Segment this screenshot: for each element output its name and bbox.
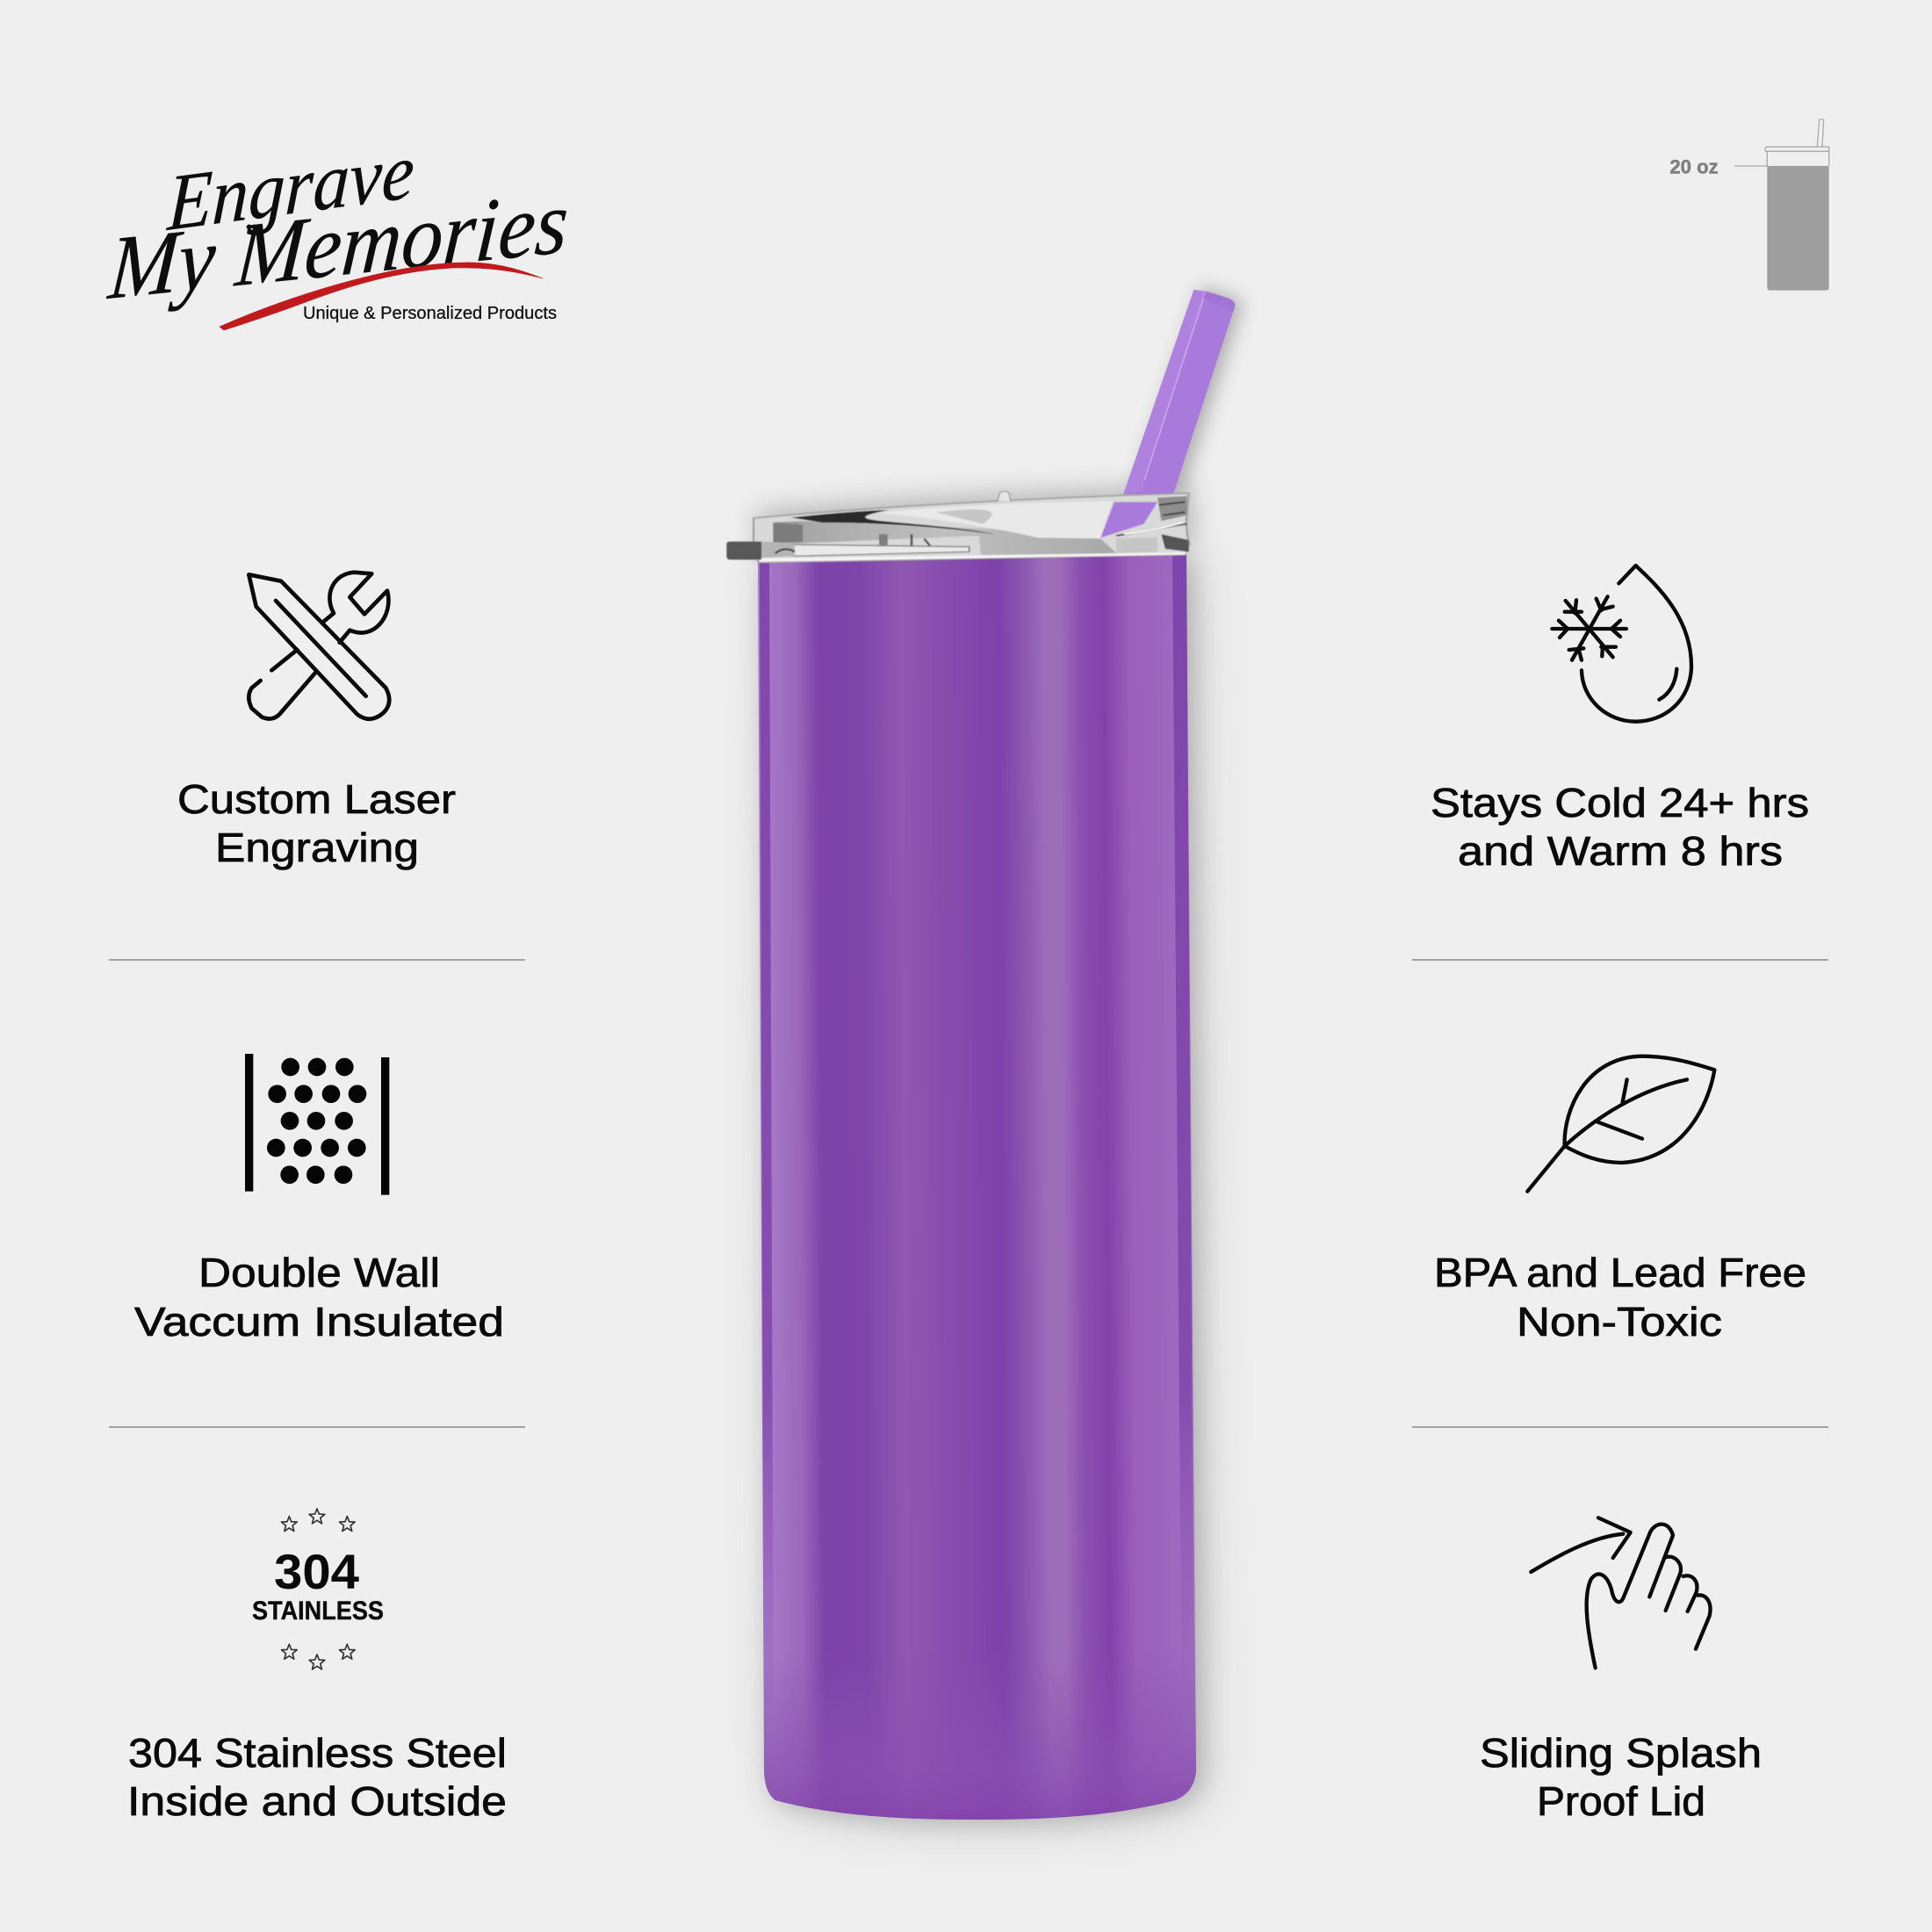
- lid windows: [879, 534, 888, 545]
- icon: swipe hand with arrow: [1531, 1517, 1711, 1668]
- label: [177, 776, 456, 870]
- tumbler shadow: [757, 286, 1244, 1825]
- label: [127, 1730, 507, 1824]
- label: Double Wall: [198, 1250, 440, 1295]
- label: Engraving: [215, 825, 419, 870]
- logo script: My Memories: My Memories: [104, 171, 572, 319]
- label: [1431, 780, 1809, 874]
- lid slider tab: [726, 542, 761, 559]
- feature: stays cold and warm: [1431, 566, 1809, 874]
- label: Vaccum Insulated: [134, 1299, 504, 1344]
- feature: sliding splash proof lid: [1480, 1517, 1762, 1824]
- lid slider bottom rail: [787, 544, 970, 556]
- icon: leaf: [1527, 1056, 1714, 1192]
- feature: BPA and lead free: [1434, 1056, 1806, 1344]
- label: Stays Cold 24+ hrs: [1431, 780, 1809, 825]
- badge number: 304: [274, 1544, 359, 1599]
- body base glow: [764, 1651, 1196, 1820]
- logo: Engrave My Memories: [104, 126, 572, 330]
- label: [1434, 1250, 1806, 1344]
- body gloss gradient: [758, 553, 1196, 1820]
- label: [1480, 1730, 1762, 1824]
- tumbler body: [758, 553, 1196, 1820]
- tumbler product: [726, 286, 1244, 1825]
- size fill: [1767, 166, 1829, 291]
- icon: crossed tools: [249, 573, 389, 719]
- label: Inside and Outside: [127, 1778, 507, 1824]
- label: Custom Laser: [177, 776, 456, 822]
- lid clear shell: [753, 494, 1190, 563]
- lid dark reflection: [791, 510, 995, 534]
- body left edge band: [760, 562, 774, 1743]
- badge word: STAINLESS: [252, 1597, 384, 1626]
- label: Proof Lid: [1537, 1778, 1705, 1824]
- straw: [1123, 290, 1235, 494]
- badge stars: [281, 1509, 355, 1669]
- size indicator: 20 oz tumbler: [1669, 119, 1829, 291]
- label: BPA and Lead Free: [1434, 1250, 1806, 1295]
- lid nub: [998, 491, 1011, 501]
- label: and Warm 8 hrs: [1458, 828, 1783, 874]
- lid right moulding: [1157, 496, 1186, 521]
- label: Non-Toxic: [1517, 1299, 1722, 1344]
- body right edge band: [1172, 555, 1194, 1743]
- straw seen through lid: [1100, 502, 1157, 537]
- icon: insulated wall dots: [245, 1054, 389, 1195]
- logo red swoosh: [220, 263, 543, 330]
- feature: 304 stainless steel: [127, 1509, 507, 1824]
- feature: double wall vacuum insulated: [134, 1054, 504, 1344]
- logo script: Engrave: Engrave: [164, 126, 416, 248]
- size outline: [1734, 119, 1829, 166]
- label: 304 Stainless Steel: [128, 1730, 507, 1776]
- lid dark left wall: [773, 523, 803, 543]
- lid: [726, 491, 1190, 563]
- icon: 304 stainless badge: [252, 1509, 384, 1669]
- logo tagline: Unique & Personalized Products: [303, 304, 557, 323]
- feature: custom laser engraving: [177, 573, 456, 870]
- lid inner grey band: [773, 521, 1116, 556]
- lid white sheen: [873, 501, 1113, 538]
- icon: snowflake and drop: [1552, 566, 1691, 722]
- label: [134, 1250, 504, 1344]
- size label: 20 oz: [1669, 155, 1719, 177]
- label: Sliding Splash: [1480, 1730, 1762, 1776]
